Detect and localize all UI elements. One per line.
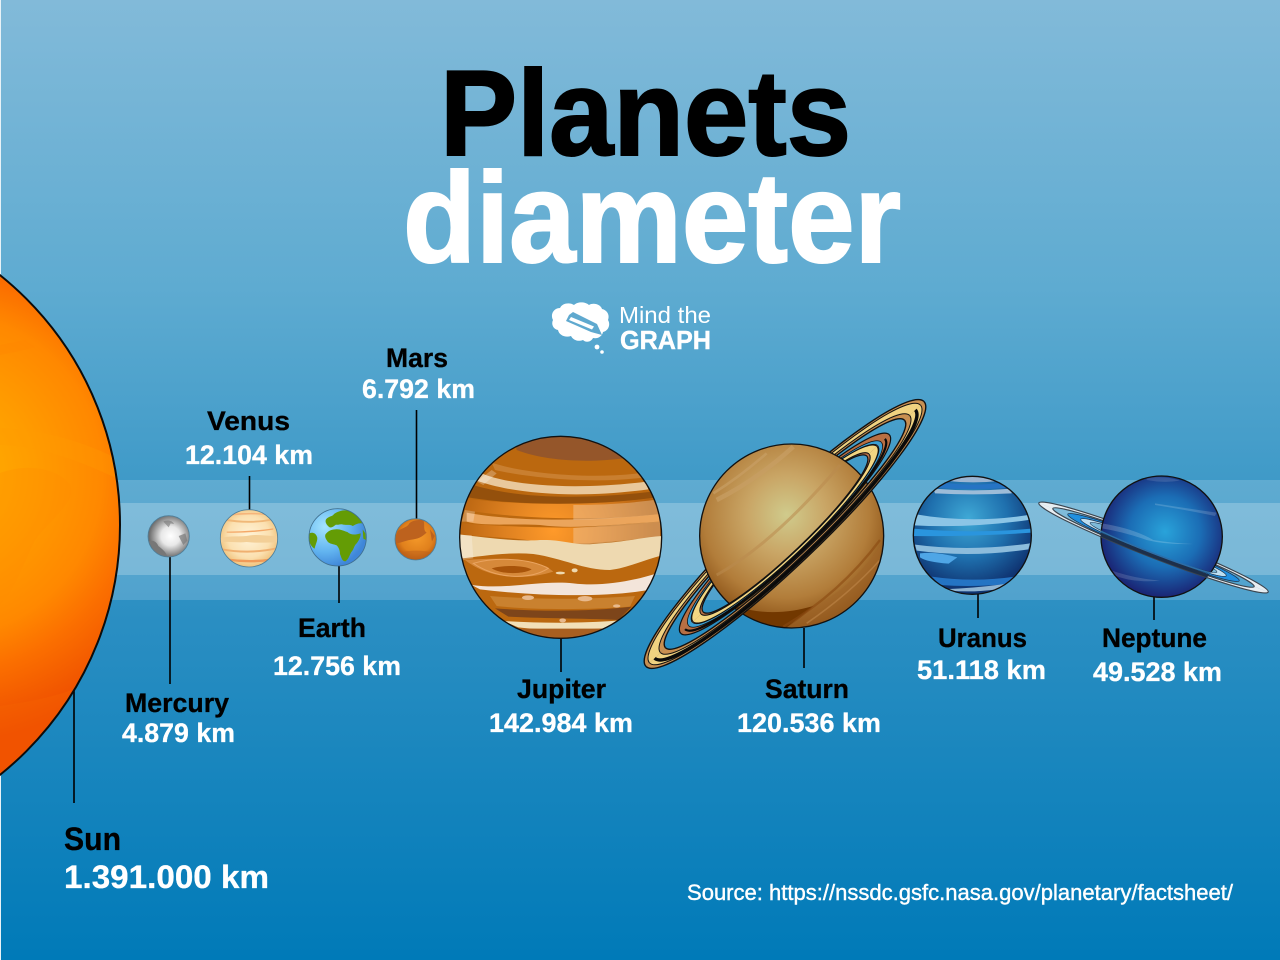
leader line bbox=[803, 628, 805, 668]
diameter: 51.118 km bbox=[917, 655, 1046, 685]
Jupiter bbox=[459, 433, 663, 738]
diameter: 142.984 km bbox=[489, 708, 633, 738]
title line: diameter: diameter bbox=[403, 147, 901, 290]
name: Mars bbox=[386, 343, 448, 373]
horizontal band: inner bbox=[100, 503, 1280, 575]
diameter: 12.104 km bbox=[185, 440, 313, 470]
planet disc bbox=[459, 433, 663, 643]
name: Uranus bbox=[938, 623, 1027, 653]
icon: brain with pencil bbox=[552, 302, 609, 354]
title line: Planets: Planets bbox=[440, 45, 851, 181]
planet disc bbox=[148, 516, 189, 557]
diameter: 4.879 km bbox=[122, 718, 235, 748]
diameter: 49.528 km bbox=[1093, 657, 1222, 687]
logo: Mind the Graph bbox=[552, 302, 711, 355]
diameter: 120.536 km bbox=[737, 708, 881, 738]
sun disc bbox=[0, 274, 121, 776]
Mars bbox=[362, 343, 475, 560]
name: Saturn bbox=[765, 674, 849, 704]
leader line bbox=[338, 566, 340, 603]
front of rings bbox=[646, 401, 926, 670]
sun leader line bbox=[73, 690, 75, 803]
leader line bbox=[560, 638, 562, 672]
source citation: Source: https://nssdc.gsfc.nasa.gov/planetary/factsheet/ bbox=[687, 880, 1234, 905]
diameter: 12.756 km bbox=[273, 651, 401, 681]
leader line bbox=[248, 476, 250, 510]
diameter: 6.792 km bbox=[362, 374, 475, 404]
Sun bbox=[0, 274, 268, 888]
Earth bbox=[273, 509, 401, 681]
left white edge bbox=[0, 0, 1, 960]
name: Venus bbox=[207, 406, 290, 436]
Mercury bbox=[122, 516, 235, 748]
planet disc bbox=[700, 444, 884, 630]
Venus bbox=[185, 406, 313, 567]
planet disc bbox=[395, 519, 436, 560]
sun name: Sun bbox=[64, 821, 121, 857]
planet disc bbox=[220, 510, 278, 567]
front of ring bbox=[1038, 502, 1269, 594]
leader line bbox=[977, 594, 979, 618]
logo text: GRAPH: GRAPH bbox=[620, 325, 711, 355]
horizontal band: outer bbox=[100, 480, 1280, 600]
planet disc bbox=[309, 509, 366, 566]
planet disc bbox=[913, 473, 1032, 594]
Saturn bbox=[644, 398, 926, 732]
leader line bbox=[416, 410, 418, 519]
name: Earth bbox=[298, 613, 366, 643]
Uranus bbox=[913, 473, 1046, 685]
title bbox=[403, 45, 901, 290]
Neptune bbox=[1035, 476, 1272, 687]
name: Jupiter bbox=[517, 674, 606, 704]
logo text: Mind the: Mind the bbox=[619, 302, 711, 328]
ring shadow over planet bbox=[1100, 530, 1211, 578]
name: Neptune bbox=[1102, 623, 1207, 653]
leader line bbox=[169, 556, 171, 684]
name: Mercury bbox=[125, 688, 229, 718]
planet disc bbox=[1101, 476, 1222, 597]
back of ring bbox=[1038, 502, 1269, 592]
sun diameter: 1.391.000 km bbox=[64, 859, 269, 895]
leader line bbox=[1153, 597, 1155, 620]
back of rings bbox=[644, 398, 924, 667]
